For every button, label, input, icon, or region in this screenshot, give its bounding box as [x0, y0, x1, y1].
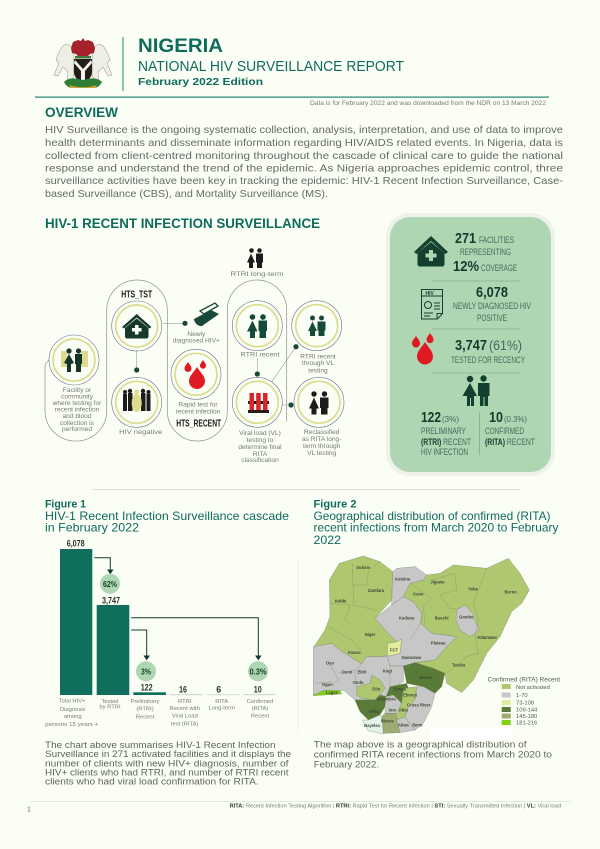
stat: preliminary recent: (3%) — [442, 415, 459, 424]
state labels: Bayelsa — [364, 723, 381, 728]
data note: Data is for February 2022 and was downloaded from the NDR on 13 March 2022 — [310, 101, 547, 107]
figure 2 heading — [314, 499, 558, 547]
state labels: Enugu — [394, 687, 407, 692]
category labels: Total HIV+ — [59, 699, 86, 705]
south-west states — [313, 643, 403, 700]
stat: confirmed recent: (RITA) RECENT — [485, 437, 535, 447]
stat: preliminary recent: HIV INFECTION — [421, 447, 468, 457]
overview paragraph: surveillance activities have been key in tracking the epidemic: HIV-1 Recent Infection Surveillance, Case- — [45, 176, 563, 187]
state labels: Kano — [413, 591, 424, 596]
label: RTRI recent — [240, 352, 280, 359]
text: chart description: number of clients with new HIV+ diagnosis, number of — [45, 758, 289, 769]
category labels: among — [64, 714, 82, 720]
label: newly diagnosed — [173, 331, 220, 345]
category labels: Confirmed — [247, 699, 273, 705]
label: term through — [303, 443, 341, 450]
text: chart description: Surveillance in 271 activated facilities and it displays the — [45, 749, 291, 760]
map mask — [430, 727, 513, 740]
state labels: Taraba — [452, 663, 466, 668]
stat: confirmed recent: (0.3%) — [504, 415, 527, 424]
text: map description: The map above is a geographical distribution of — [314, 739, 527, 750]
category labels: persons 15 years + — [45, 722, 99, 728]
stat: newly diagnosed — [453, 284, 531, 323]
label: and blood — [63, 413, 92, 420]
label: recent infection — [55, 407, 100, 414]
category labels: Viral Load — [172, 714, 198, 720]
north-east states — [403, 558, 529, 693]
Gombe — [456, 605, 479, 637]
figure 1 heading: Figure 1 — [45, 499, 86, 511]
legend — [488, 677, 560, 726]
header divider — [122, 37, 124, 91]
category labels: Long-term — [208, 706, 235, 712]
label: RTRI long-term: RTRI long-term — [230, 271, 284, 278]
text: map description: confirmed RITA recent infections from March 2020 to — [314, 750, 552, 761]
label: performed — [62, 426, 92, 433]
state labels: Abia — [399, 708, 409, 713]
section divider — [92, 489, 520, 490]
state labels: Borno — [505, 590, 517, 595]
label: HIV negative — [119, 429, 163, 436]
state labels: Ondo — [353, 680, 364, 685]
icon: blood drops — [412, 333, 434, 364]
state labels: Kogi — [383, 669, 392, 674]
overview paragraph: HIV Surveillance is the ongoing systematic collection, analysis, interpretation, and use of data to improve — [45, 125, 563, 136]
state labels: Sokoto — [356, 565, 371, 570]
label: newly diagnosed: Newly — [187, 331, 206, 338]
label: testing — [308, 368, 328, 375]
figure 1 heading: in February 2022 — [45, 521, 139, 535]
text: chart description: HIV+ clients who had RTRI, and number of RTRI recent — [45, 767, 289, 778]
state labels: Jigawa — [430, 580, 445, 585]
state labels: Yobe — [468, 587, 479, 592]
state labels: Lagos — [326, 690, 339, 695]
header rule — [35, 96, 549, 98]
flow diagram: surveillance process — [45, 248, 344, 464]
state labels: Delta — [369, 709, 380, 714]
overview section — [45, 105, 563, 200]
stat: confirmed recent — [485, 409, 535, 447]
label: community — [61, 394, 94, 401]
percent badges: 3% — [141, 666, 151, 676]
stat: newly diagnosed: NEWLY DIAGNOSED HIV — [453, 301, 531, 311]
stat: preliminary recent: (RTRI) RECENT — [421, 437, 471, 447]
arrows — [94, 558, 261, 660]
footer rule — [30, 800, 571, 803]
overview heading: OVERVIEW — [45, 105, 118, 120]
text: map description — [314, 739, 552, 771]
state labels: Rivers — [381, 719, 394, 724]
state labels: Imo — [389, 708, 396, 713]
stat: newly diagnosed: POSITIVE — [477, 313, 507, 323]
state labels: Cross River — [407, 702, 431, 707]
Lagos — [313, 690, 342, 696]
Akwa Ibom — [397, 717, 415, 733]
value labels: 16 — [179, 685, 187, 695]
state labels: Kwara — [348, 650, 361, 655]
legend: 1-70 — [516, 693, 528, 699]
category labels: RTRI — [178, 699, 192, 705]
text: chart description — [45, 740, 291, 787]
state labels: Kebbi — [335, 599, 346, 604]
state labels: Gombe — [459, 615, 474, 620]
figure 1 heading: HIV-1 Recent Infection Surveillance cascade — [45, 509, 289, 523]
icon: HIV document — [422, 290, 442, 319]
category labels — [45, 699, 273, 728]
state labels: Katsina — [395, 577, 411, 582]
node: RTRI recent through VL testing — [292, 301, 342, 375]
state labels: Niger — [365, 632, 376, 637]
category labels: Preliminary — [130, 699, 160, 705]
label — [52, 387, 102, 433]
node: facility or community — [49, 335, 102, 433]
node: health facility — [112, 301, 162, 351]
category labels: Recent — [251, 713, 270, 719]
icon: test device — [194, 303, 219, 326]
figure 2 heading: recent infections from March 2020 to February — [314, 521, 558, 535]
edition: February 2022 Edition — [138, 76, 263, 88]
label: HTS_RECENT: HTS_RECENT — [176, 419, 221, 430]
legend: Confirmed (RITA) Recent — [488, 677, 560, 684]
category labels: Recent with — [170, 706, 200, 712]
stat: tested for recency: (61%) — [489, 337, 522, 353]
stat: preliminary recent: PRELIMINARY — [421, 426, 466, 436]
category labels: (RTRI) — [136, 707, 154, 713]
state labels — [322, 565, 517, 728]
label — [300, 354, 336, 375]
state labels: Ekiti — [358, 670, 366, 675]
label: classification — [241, 457, 279, 464]
category labels: RITA — [215, 699, 228, 705]
legend: 145-180 — [516, 714, 537, 720]
category labels: Tested — [101, 699, 119, 705]
percent badges: 0.3% — [250, 666, 267, 676]
stat: facilities: COVERAGE — [481, 263, 517, 273]
title: NIGERIA — [138, 35, 223, 57]
text: map description: February 2022. — [314, 760, 379, 771]
label: RITA — [253, 451, 268, 458]
state labels: Edo — [372, 687, 381, 692]
state labels: Anambra — [378, 697, 396, 702]
stat: preliminary recent — [421, 409, 471, 457]
title block — [138, 35, 404, 88]
category labels: (RITA) — [252, 706, 268, 712]
figure 2 heading: Figure 2 — [314, 499, 356, 511]
value labels: 6,078 — [67, 539, 85, 549]
connector dots — [134, 321, 299, 408]
overview paragraph — [45, 125, 563, 200]
category labels: Recent — [136, 714, 155, 720]
map: confirmed RITA infections by state — [313, 556, 529, 734]
state labels: Ibom — [412, 723, 423, 728]
stat: tested for recency — [451, 337, 525, 365]
state labels: Adamawa — [477, 635, 497, 640]
state labels: Akwa — [398, 723, 409, 728]
value labels: 10 — [254, 685, 262, 695]
label — [238, 430, 282, 464]
legend: Not activated — [516, 685, 550, 691]
legend: 181-216 — [516, 720, 537, 726]
figure 2 heading: 2022 — [314, 533, 341, 547]
Bayelsa — [362, 715, 383, 734]
node: HIV negative — [112, 377, 163, 436]
state labels: Oyo — [326, 660, 334, 665]
state labels: Nasarawa — [402, 655, 422, 660]
Rivers — [382, 713, 400, 733]
state labels: FCT — [390, 648, 398, 653]
node: viral load testing — [232, 377, 282, 464]
internal state borders — [315, 562, 500, 687]
state labels: Ogun — [322, 682, 333, 687]
category labels: by RTRI — [99, 705, 121, 711]
stat: confirmed recent: 10 — [489, 409, 503, 426]
Kaduna Plateau Nasarawa — [375, 597, 457, 666]
overview paragraph: collected from client-centred monitoring throughout the cascade of clinical care to guide the national — [45, 151, 563, 162]
bar chart: cascade — [45, 539, 276, 728]
icon: Nigerian coat of arms — [54, 38, 112, 88]
node: RTRI recent — [232, 301, 282, 359]
stat: facilities — [453, 230, 517, 275]
footer glossary: RITA: Recent Infection Testing Algorithm | RTRI: Rapid Test for Recent Infection | STI: Sexually Transmitted Infection | VL: Viral load — [230, 804, 561, 810]
FCT — [387, 639, 402, 656]
label: RTRI recent — [300, 354, 336, 361]
icon: health facility — [414, 236, 448, 266]
label: as RITA long- — [302, 436, 341, 443]
label: through VL — [302, 360, 334, 367]
label: Rapid test for — [178, 402, 218, 409]
state labels: Kaduna — [399, 616, 415, 621]
label: Reclassified — [304, 429, 340, 436]
label: HTS_TST: HTS_TST — [121, 290, 152, 301]
Benue — [403, 663, 445, 693]
value labels: 6 — [216, 685, 221, 695]
panel: key figures — [386, 213, 555, 476]
text: chart description: The chart above summarises HIV-1 Recent Infection — [45, 740, 276, 751]
icon: couple — [462, 375, 490, 406]
Cross River — [405, 687, 435, 730]
state labels: Osun — [342, 670, 353, 675]
stat: preliminary recent: 122 — [421, 409, 441, 426]
Enugu and Anambra — [386, 683, 410, 703]
value labels — [67, 539, 262, 695]
label: recent infection — [176, 409, 221, 416]
label: Viral load (VL) — [239, 430, 281, 437]
stat: facilities: 271 — [455, 230, 476, 247]
overview paragraph: health determinants and disseminate information regarding HIV/AIDS related events. In Nigeria, data is — [45, 138, 563, 149]
figure 2 heading: Geographical distribution of confirmed (RITA) — [314, 509, 550, 523]
page number: 1 — [27, 806, 31, 814]
overview paragraph: response and understand the trend of the epidemic. As Nigeria approaches epidemic control, three — [45, 164, 563, 174]
stat: tested for recency: 3,747 — [455, 337, 487, 354]
north-west and north-central states — [314, 556, 397, 664]
icon: RTRI long-term couple — [247, 248, 263, 268]
stat: confirmed recent: CONFIRMED — [485, 426, 524, 436]
stat: tested for recency: TESTED FOR RECENCY — [451, 355, 525, 365]
icon: HIV document: HIV — [426, 291, 434, 297]
label: collection is — [60, 420, 95, 427]
category labels: test (RITA) — [171, 722, 199, 728]
stat: newly diagnosed: 6,078 — [476, 284, 508, 301]
value labels: 122 — [141, 683, 153, 693]
node: rapid test — [171, 349, 221, 416]
percent badges: 62% — [103, 579, 117, 589]
value labels: 3,747 — [102, 596, 120, 606]
label: VL testing — [307, 450, 337, 457]
Ebonyi and Abia — [397, 687, 417, 720]
label — [302, 429, 341, 457]
state labels: Benue — [419, 675, 433, 680]
state labels: Plateau — [431, 641, 446, 646]
overview paragraph: based Surveillance (CBS), and Mortality Surveillance (MS). — [45, 189, 328, 200]
legend: 73-108 — [516, 700, 534, 706]
label — [176, 402, 221, 416]
stat: facilities: FACILITIES — [479, 235, 514, 245]
label: newly diagnosed: diagnosed HIV+ — [173, 338, 220, 345]
Delta — [355, 695, 386, 720]
label: where testing for — [52, 400, 102, 407]
legend: 109-144 — [516, 708, 538, 714]
Imo — [385, 695, 402, 713]
text: chart description: clients who had viral load confirmation for RITA. — [45, 776, 259, 787]
percent badges — [100, 574, 268, 681]
category labels: Diagnosis — [60, 707, 86, 713]
state labels: Zamfara — [368, 588, 385, 593]
label: Facility or — [63, 387, 92, 394]
figure 1 heading — [45, 499, 289, 535]
label: determine final — [238, 444, 282, 451]
section heading: HIV-1 recent infection surveillance: HIV-1 RECENT INFECTION SURVEILLANCE — [45, 216, 320, 231]
stat: facilities: REPRESENTING — [460, 247, 511, 257]
subtitle: NATIONAL HIV SURVEILLANCE REPORT — [138, 59, 404, 75]
stat: facilities: 12% — [453, 258, 479, 275]
label: testing to — [247, 437, 274, 444]
node: reclassified — [294, 377, 344, 457]
Edo — [357, 675, 385, 700]
state labels: Bauchi — [435, 616, 449, 621]
Katsina — [392, 567, 427, 605]
state labels: Ebonyi — [403, 692, 417, 697]
